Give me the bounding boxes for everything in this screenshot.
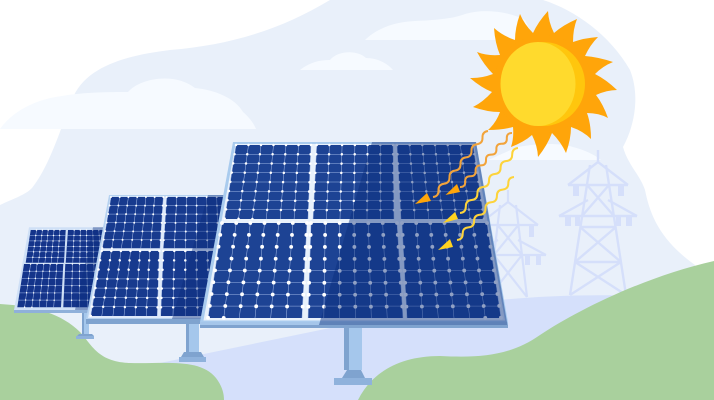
pylon: right: [559, 150, 637, 295]
hill: right: [358, 261, 714, 400]
panel: middle solar array: [86, 195, 224, 362]
sun disc: [501, 42, 585, 126]
panel: small solar array: [14, 227, 103, 339]
arrow: orange ray 2: [446, 133, 512, 195]
arrow: yellow ray 3: [443, 148, 518, 223]
clouds: [0, 11, 601, 160]
post: small: [76, 313, 94, 339]
ground: [160, 295, 714, 400]
sun rays: [470, 11, 617, 157]
post: large: [334, 328, 372, 385]
sun: [470, 11, 617, 157]
arrow: orange ray 1: [415, 131, 488, 204]
post: middle: [179, 323, 206, 362]
panel: large solar array: [200, 142, 510, 385]
hill: left: [0, 304, 224, 400]
arrow: yellow ray 4: [438, 177, 514, 250]
pylon: left: [470, 190, 546, 297]
